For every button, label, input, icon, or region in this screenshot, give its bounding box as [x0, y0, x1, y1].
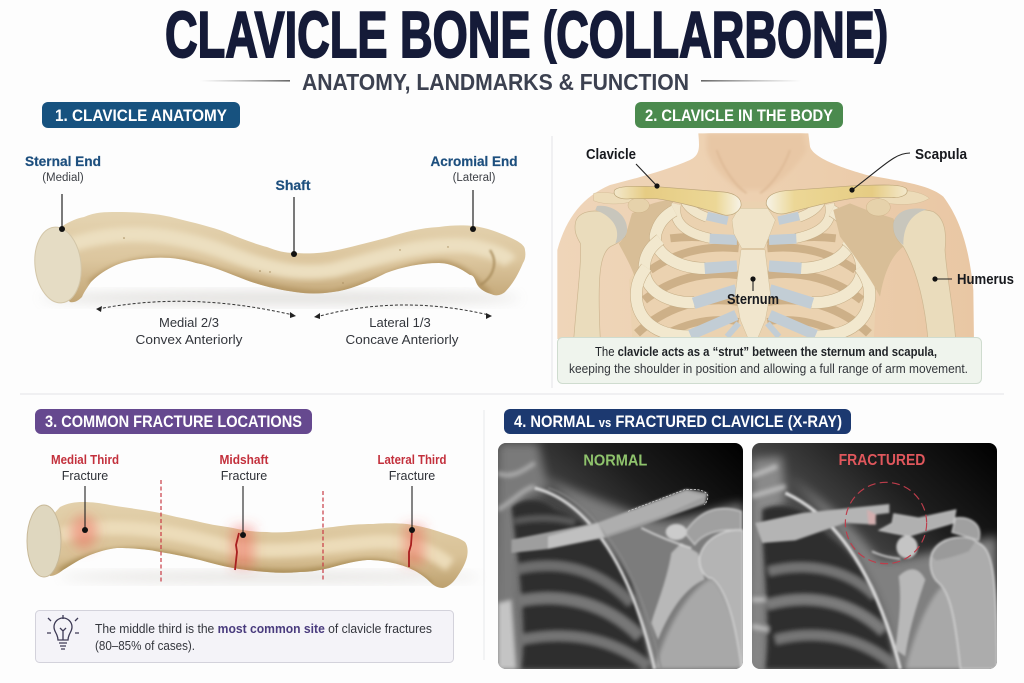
callout: strut function: [558, 338, 982, 384]
x-ray: normal: [498, 443, 743, 669]
label: acromial end: [430, 153, 518, 232]
callout: strut function: The clavicle acts as a “strut” between the sternum and scapula,: [595, 345, 937, 359]
right scapula: [833, 203, 903, 297]
subtitle with side rules: ANATOMY, LANDMARKS & FUNCTION: [302, 69, 689, 95]
title: CLAVICLE BONE: [165, 0, 691, 71]
panel: normal vs fractured x-ray: [498, 409, 997, 669]
title: COLLARBONE: [556, 0, 875, 71]
right ribs: [767, 202, 870, 337]
label: lateral third fracture: [378, 452, 447, 533]
heading: section 4 badge: [504, 409, 851, 434]
text: lateral one third: [346, 315, 459, 347]
label: normal: NORMAL: [583, 453, 648, 470]
bone shadow: [40, 292, 520, 304]
arrow: medial curve: [96, 301, 296, 318]
text: medial two thirds: Convex Anteriorly: [136, 332, 243, 347]
illustration: clavicle bone: [34, 212, 526, 304]
panel: clavicle in the body: [557, 102, 1014, 384]
left ribs: [636, 202, 739, 337]
label: sternum: [727, 276, 779, 308]
right clavicle highlighted: [766, 185, 907, 214]
divider markers between thirds: [161, 480, 323, 582]
label: sternal end: Sternal End: [25, 153, 101, 169]
label: midshaft fracture: Fracture: [221, 469, 267, 483]
label: lateral third fracture: Lateral Third: [378, 452, 447, 467]
left scapula: [618, 200, 673, 275]
heading: section 2 badge: 2. CLAVICLE IN THE BODY: [645, 106, 834, 125]
label: clavicle: [586, 147, 660, 189]
cage interior: [629, 202, 877, 340]
sternum: [732, 208, 775, 248]
heading: section 3 badge: 3. COMMON FRACTURE LOCATIONS: [45, 412, 302, 431]
heading: section 1 badge: [42, 102, 240, 128]
text: medial two thirds: [136, 315, 243, 347]
title: (: [543, 0, 556, 64]
title: ): [875, 0, 888, 64]
label: shaft: [276, 177, 311, 257]
callout: most common site: The middle third is the most common site of clavicle fractures: [95, 622, 432, 636]
label: midshaft fracture: Midshaft: [220, 452, 269, 467]
panel: clavicle anatomy: [25, 102, 530, 347]
fracture cracks: [235, 531, 412, 570]
label: medial third fracture: Medial Third: [51, 452, 119, 467]
heading: section 1 badge: 1. CLAVICLE ANATOMY: [55, 106, 228, 125]
text: lateral one third: Lateral 1/3: [369, 315, 431, 330]
arrow: lateral curve: [314, 305, 492, 319]
label: humerus: Humerus: [957, 272, 1014, 288]
left clavicle highlighted: [614, 186, 741, 215]
fracture glows: [71, 515, 424, 568]
label: shaft: Shaft: [276, 177, 311, 193]
text: medial two thirds: Medial 2/3: [159, 315, 219, 330]
bone shadow: [60, 572, 480, 582]
callout: most common site: (80–85% of cases).: [95, 639, 195, 653]
label: medial third fracture: Fracture: [62, 469, 108, 483]
callout: strut function: keeping the shoulder in position and allowing a full range of arm movement.: [569, 362, 968, 376]
label: sternal end: [25, 153, 101, 232]
label: sternal end: (Medial): [42, 172, 84, 184]
heading: section 3 badge: [35, 409, 312, 434]
label: sternum: Sternum: [727, 292, 779, 308]
label: acromial end: Acromial End: [430, 153, 518, 169]
label: scapula: [849, 147, 968, 193]
label: medial third fracture: [51, 452, 119, 533]
heading: section 4 badge: 4. NORMAL vs FRACTURED CLAVICLE (X-RAY): [514, 412, 842, 431]
label: humerus: [932, 272, 1014, 288]
fracture highlight circle: [845, 482, 927, 564]
label: scapula: Scapula: [915, 147, 968, 163]
illustration: chest skeleton: [557, 133, 974, 343]
label: lateral third fracture: Fracture: [389, 469, 435, 483]
icon: light bulb: [47, 615, 79, 649]
label: clavicle: Clavicle: [586, 147, 636, 163]
x-ray: fractured: [752, 443, 997, 669]
heading: section 2 badge: [635, 102, 843, 128]
label: acromial end: (Lateral): [453, 172, 496, 184]
label: fractured: FRACTURED: [839, 452, 925, 469]
text: lateral one third: Concave Anteriorly: [346, 332, 459, 347]
panel: common fracture locations: [25, 409, 480, 662]
illustration: fractured clavicle: [26, 502, 468, 588]
callout: most common site: [36, 610, 454, 662]
right humerus: [893, 209, 956, 343]
label: midshaft fracture: [220, 452, 269, 538]
left humerus: [574, 211, 625, 340]
